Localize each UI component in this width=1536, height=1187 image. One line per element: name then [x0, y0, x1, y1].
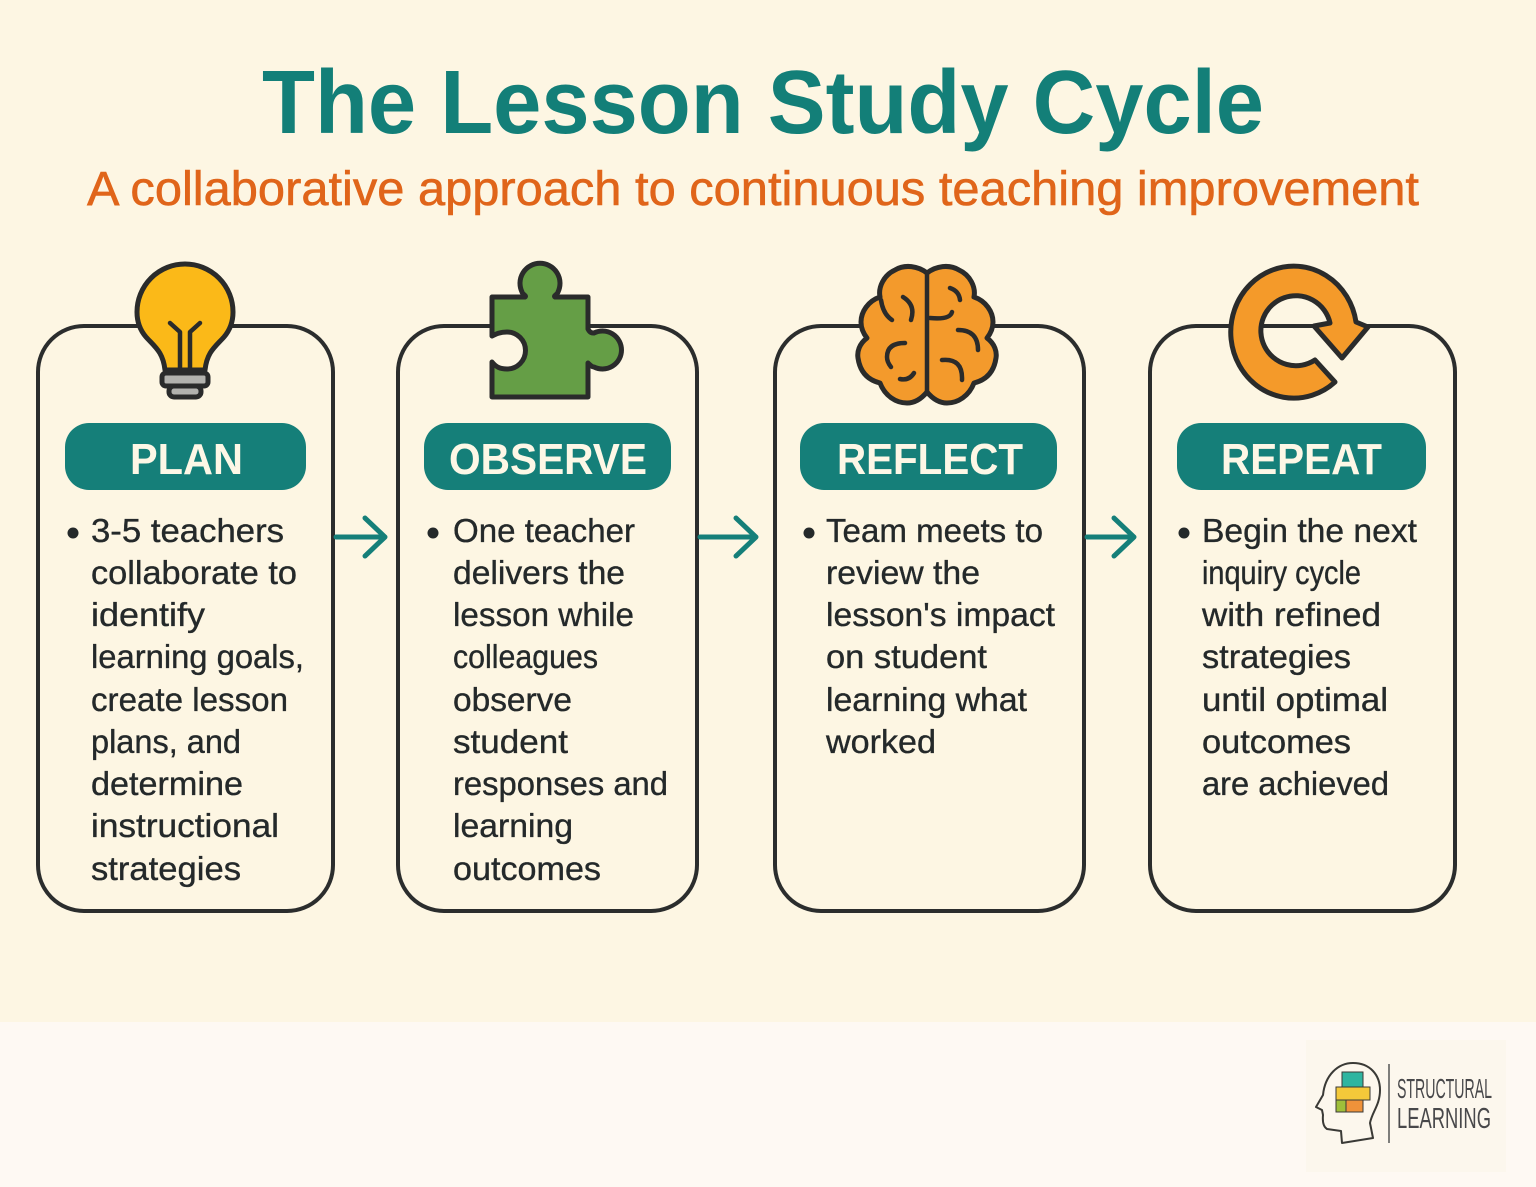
panel: repeat: [1150, 266, 1455, 911]
bullet text: plan: determine: [91, 765, 243, 802]
bullet text: plan: strategies: [91, 850, 241, 887]
bullet text: plan: [68, 512, 304, 887]
card outline: repeat: [1150, 326, 1455, 911]
heading pill: reflect: [800, 423, 1057, 490]
icon: puzzle piece: [492, 263, 621, 397]
bullet text: plan: instructional: [91, 807, 279, 844]
bullet text: reflect: lesson's impact: [826, 596, 1055, 633]
bullet text: plan: create lesson: [91, 681, 288, 718]
bullet text: reflect: review the: [826, 554, 980, 591]
bullet text: observe: observe: [453, 681, 572, 718]
bullet text: observe: delivers the: [453, 554, 625, 591]
bullet text: reflect: learning what: [826, 681, 1027, 718]
bullet text: repeat: inquiry cycle: [1202, 554, 1361, 591]
logo wordmark: [1397, 1073, 1492, 1135]
bullet text: observe: colleagues: [453, 638, 598, 675]
icon: brain: [858, 266, 996, 403]
bullet text: repeat: are achieved: [1202, 765, 1389, 802]
bullet text: reflect: on student: [826, 638, 987, 675]
card outline: plan: [38, 326, 333, 911]
heading pill: reflect: REFLECT: [837, 435, 1023, 484]
logo: structural learning: [1306, 1040, 1506, 1172]
heading pill: plan: [65, 423, 306, 490]
bullet text: repeat: until optimal: [1202, 681, 1388, 718]
title: The Lesson Study Cycle: [262, 53, 1264, 153]
icon: light bulb: [137, 264, 233, 397]
heading pill: repeat: REPEAT: [1221, 435, 1382, 484]
bullet text: plan: plans, and: [91, 723, 241, 760]
bullet text: repeat: with refined: [1201, 596, 1381, 633]
subtitle: A collaborative approach to continuous teaching improvement: [87, 163, 1419, 216]
panel: plan: [38, 264, 333, 911]
bullet text: observe: [428, 512, 668, 887]
heading pill: plan: PLAN: [130, 435, 243, 484]
icon: circular arrow: [1231, 266, 1368, 398]
bullet text: observe: responses and: [453, 765, 668, 802]
bullet text: observe: outcomes: [453, 850, 601, 887]
panel: observe: [398, 263, 697, 911]
card outline: observe: [398, 326, 697, 911]
bullet text: observe: learning: [453, 807, 573, 844]
arrow: reflect to repeat: [1087, 518, 1134, 556]
bullet text: observe: lesson while: [453, 596, 634, 633]
arrow: observe to reflect: [700, 518, 756, 556]
bullet text: plan: identify: [91, 596, 206, 633]
background: footer band: [0, 1022, 1536, 1187]
bullet text: reflect: Team meets to: [826, 512, 1043, 549]
bullet text: repeat: [1178, 512, 1417, 802]
heading pill: observe: OBSERVE: [449, 435, 647, 484]
bullet text: plan: 3-5 teachers: [91, 512, 284, 549]
bullet text: plan: learning goals,: [91, 638, 304, 675]
bullet text: observe: One teacher: [453, 512, 635, 549]
card outline: reflect: [775, 326, 1084, 911]
bullet text: repeat: Begin the next: [1202, 512, 1417, 549]
bullet text: reflect: [804, 512, 1055, 760]
panel: reflect: [775, 266, 1084, 911]
logo icon: head with blocks: [1316, 1063, 1380, 1143]
bullet text: reflect: worked: [825, 723, 936, 760]
bullet text: plan: collaborate to: [91, 554, 297, 591]
bullet text: repeat: outcomes: [1202, 723, 1351, 760]
bullet text: repeat: strategies: [1202, 638, 1351, 675]
heading pill: repeat: [1177, 423, 1426, 490]
arrow: plan to observe: [336, 518, 385, 556]
bullet text: observe: student: [453, 723, 568, 760]
heading pill: observe: [424, 423, 671, 490]
